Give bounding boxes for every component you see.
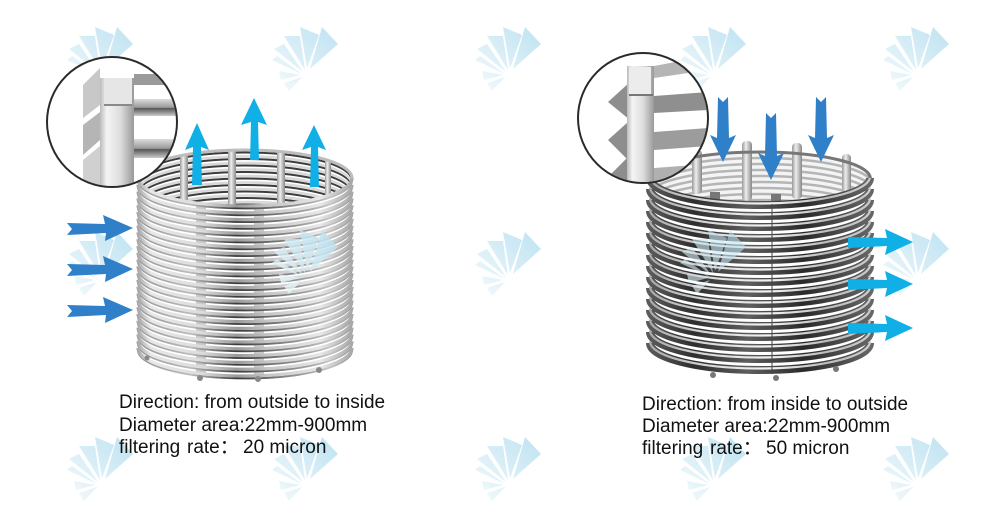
watermark on right cylinder [680, 230, 746, 294]
arrows: inflow down [710, 97, 834, 180]
arrows: outflow right [848, 229, 913, 341]
left wedge wire cylinder [138, 150, 352, 382]
left specification text: filtering [119, 437, 180, 458]
right detail inset circle [578, 53, 708, 186]
left specification text: Diameter area:22mm-900mm [119, 415, 367, 436]
right specification text: filtering [642, 438, 703, 459]
arrows: outflow up [185, 98, 326, 187]
left specification text [119, 392, 385, 458]
right wedge wire cylinder [648, 141, 872, 381]
right specification text: Diameter area:22mm-900mm [642, 416, 890, 437]
right specification text [642, 394, 908, 459]
watermark on left cylinder [272, 230, 338, 294]
left specification text: Direction: from outside to inside [119, 392, 385, 413]
arrows: inflow left [67, 215, 133, 323]
right specification text: 50 micron [766, 438, 849, 459]
left specification text: rate： [187, 437, 239, 458]
left specification text: 20 micron [243, 437, 326, 458]
right specification text: Direction: from inside to outside [642, 394, 908, 415]
left detail inset circle [47, 57, 179, 190]
right specification text: rate： [710, 438, 762, 459]
